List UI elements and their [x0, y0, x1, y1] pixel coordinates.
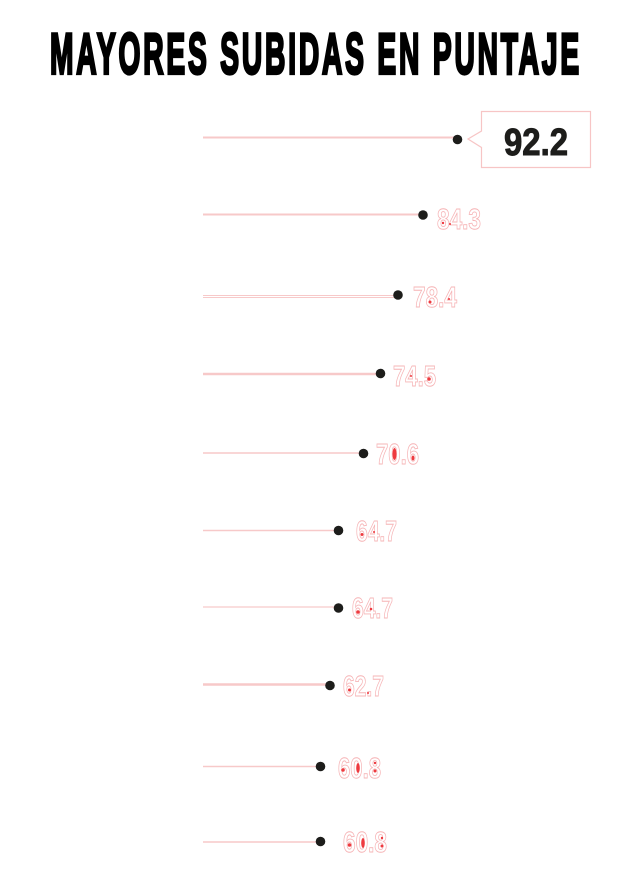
row 9: 60.8: 60.8: [338, 753, 381, 785]
row 2: 84.3: 84.3: [437, 204, 481, 236]
row 4: 74.5: [203, 361, 436, 393]
row 3: 78.4: 78.4: [413, 282, 457, 314]
lollipop chart: [203, 112, 590, 859]
row 6: 64.7: 64.7: [356, 516, 397, 548]
row 2: 84.3: [203, 204, 481, 236]
row 8: 62.7: [203, 671, 384, 703]
row 6: 64.7: [203, 516, 397, 548]
row 7: 64.7: [203, 593, 393, 625]
callout: 92.2: 92.2: [504, 122, 568, 164]
row 3: 78.4: [203, 282, 457, 314]
row 1: 92.2: [203, 112, 590, 168]
row 10: 60.8: 60.8: [343, 827, 387, 859]
title: MAYORES SUBIDAS EN PUNTAJE: [50, 21, 579, 86]
row 10: 60.8: [203, 827, 387, 859]
row 5: 70.6: [203, 439, 419, 471]
row 5: 70.6: 70.6: [376, 439, 419, 471]
row 8: 62.7: 62.7: [343, 671, 384, 703]
callout: 92.2: [468, 112, 590, 168]
row 9: 60.8: [203, 753, 381, 785]
row 4: 74.5: 74.5: [393, 361, 436, 393]
row 7: 64.7: 64.7: [352, 593, 393, 625]
